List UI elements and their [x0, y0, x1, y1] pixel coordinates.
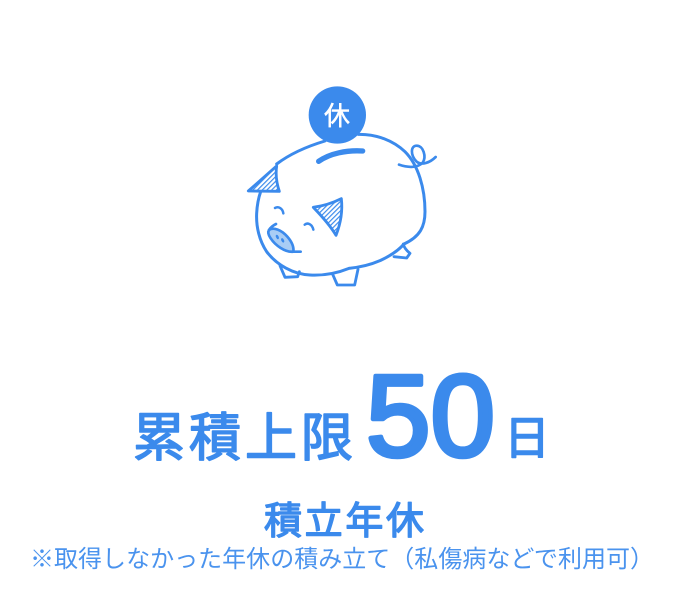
coin label: 休 — [324, 101, 350, 131]
subheading: 積立年休 — [264, 501, 424, 543]
middle leg — [333, 269, 358, 285]
number 50: 50 — [366, 351, 495, 481]
snout — [268, 229, 293, 252]
right ear — [313, 199, 342, 235]
left eye — [275, 207, 283, 213]
back leg — [394, 244, 410, 258]
left ear — [248, 166, 279, 191]
icon: piggy bank with coin — [248, 86, 436, 285]
snout line — [269, 224, 301, 252]
coin slot — [319, 151, 363, 161]
unit: days: 日 — [504, 412, 550, 464]
heading: cumulative limit: 累積上限 — [133, 410, 353, 468]
coin — [309, 86, 366, 144]
note: ※取得しなかった年休の積み立て（私傷病などで利用可） — [30, 546, 654, 573]
right eye — [305, 224, 313, 230]
front leg — [280, 266, 299, 277]
pig body outline — [257, 134, 425, 275]
nostrils — [275, 234, 285, 243]
curly tail — [399, 146, 436, 167]
